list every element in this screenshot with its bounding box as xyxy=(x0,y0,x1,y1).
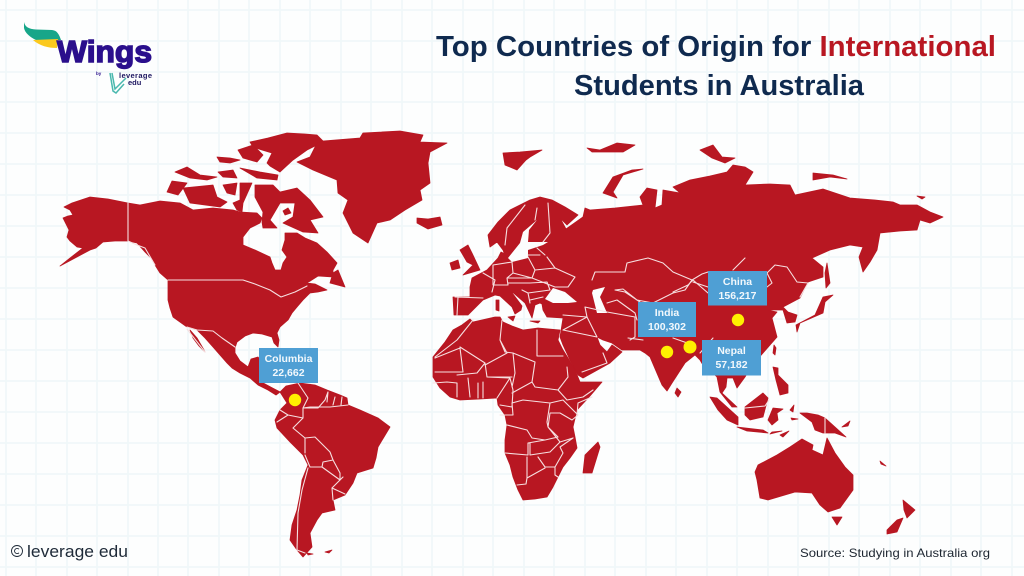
marker: China xyxy=(732,314,744,326)
icon: leverage V xyxy=(110,73,126,93)
Falkland and Tierra del Fuego islands xyxy=(307,550,332,555)
marker: Columbia xyxy=(289,394,301,406)
Baltic Sea xyxy=(508,220,548,262)
label: India: India xyxy=(655,307,679,319)
UK and Ireland xyxy=(450,245,480,275)
marker: Nepal xyxy=(684,340,696,354)
logo wordmark: Wings xyxy=(57,34,152,69)
country borders xyxy=(128,203,825,433)
title line 2: Students in Australia xyxy=(574,70,865,102)
label: Nepal xyxy=(702,340,761,376)
label: India: 100,302 xyxy=(648,321,686,333)
Mediterranean islands xyxy=(496,300,540,323)
footer brand: leverage edu xyxy=(27,543,128,561)
Caspian Sea xyxy=(592,287,607,313)
Southeast Asia islands xyxy=(675,345,850,437)
Japan and Sakhalin xyxy=(796,263,833,332)
label: Nepal: Nepal xyxy=(717,345,746,357)
Greenland xyxy=(297,131,447,243)
label: Columbia: Columbia xyxy=(265,353,313,365)
logo by: by xyxy=(96,71,102,76)
label: China: China xyxy=(723,276,752,288)
footer: leverage edu copyright xyxy=(12,543,128,561)
title line 1: Top Countries of Origin for International xyxy=(436,31,996,63)
label: China xyxy=(708,271,767,306)
Canadian Arctic islands xyxy=(167,133,345,287)
logo edu: edu xyxy=(128,78,142,87)
Australia xyxy=(755,438,853,512)
South America xyxy=(263,383,390,557)
Black Sea xyxy=(545,288,577,303)
Africa xyxy=(433,317,602,500)
Iceland xyxy=(417,217,442,229)
marker: India xyxy=(661,346,673,358)
North America xyxy=(60,197,337,395)
Madagascar xyxy=(583,442,600,473)
label: Nepal: 57,182 xyxy=(715,359,748,371)
label: Columbia: 22,662 xyxy=(272,367,305,379)
Baja California xyxy=(190,330,205,352)
source note: Source: Studying in Australia org xyxy=(800,546,990,560)
Eurasia xyxy=(453,165,943,407)
icon: copyright xyxy=(12,546,22,556)
Tasmania and New Zealand xyxy=(832,461,915,534)
icon: yellow swoosh xyxy=(33,39,58,48)
icon: teal swoosh xyxy=(24,22,61,40)
Arctic islands of Eurasia xyxy=(503,143,925,199)
logo: Wings by leverage edu xyxy=(24,22,152,93)
label: India xyxy=(638,302,696,337)
world map xyxy=(60,131,943,557)
label: China: 156,217 xyxy=(719,290,757,302)
title xyxy=(436,31,996,102)
label: Columbia xyxy=(259,348,318,383)
logo leverage edu: leverage xyxy=(119,71,152,80)
